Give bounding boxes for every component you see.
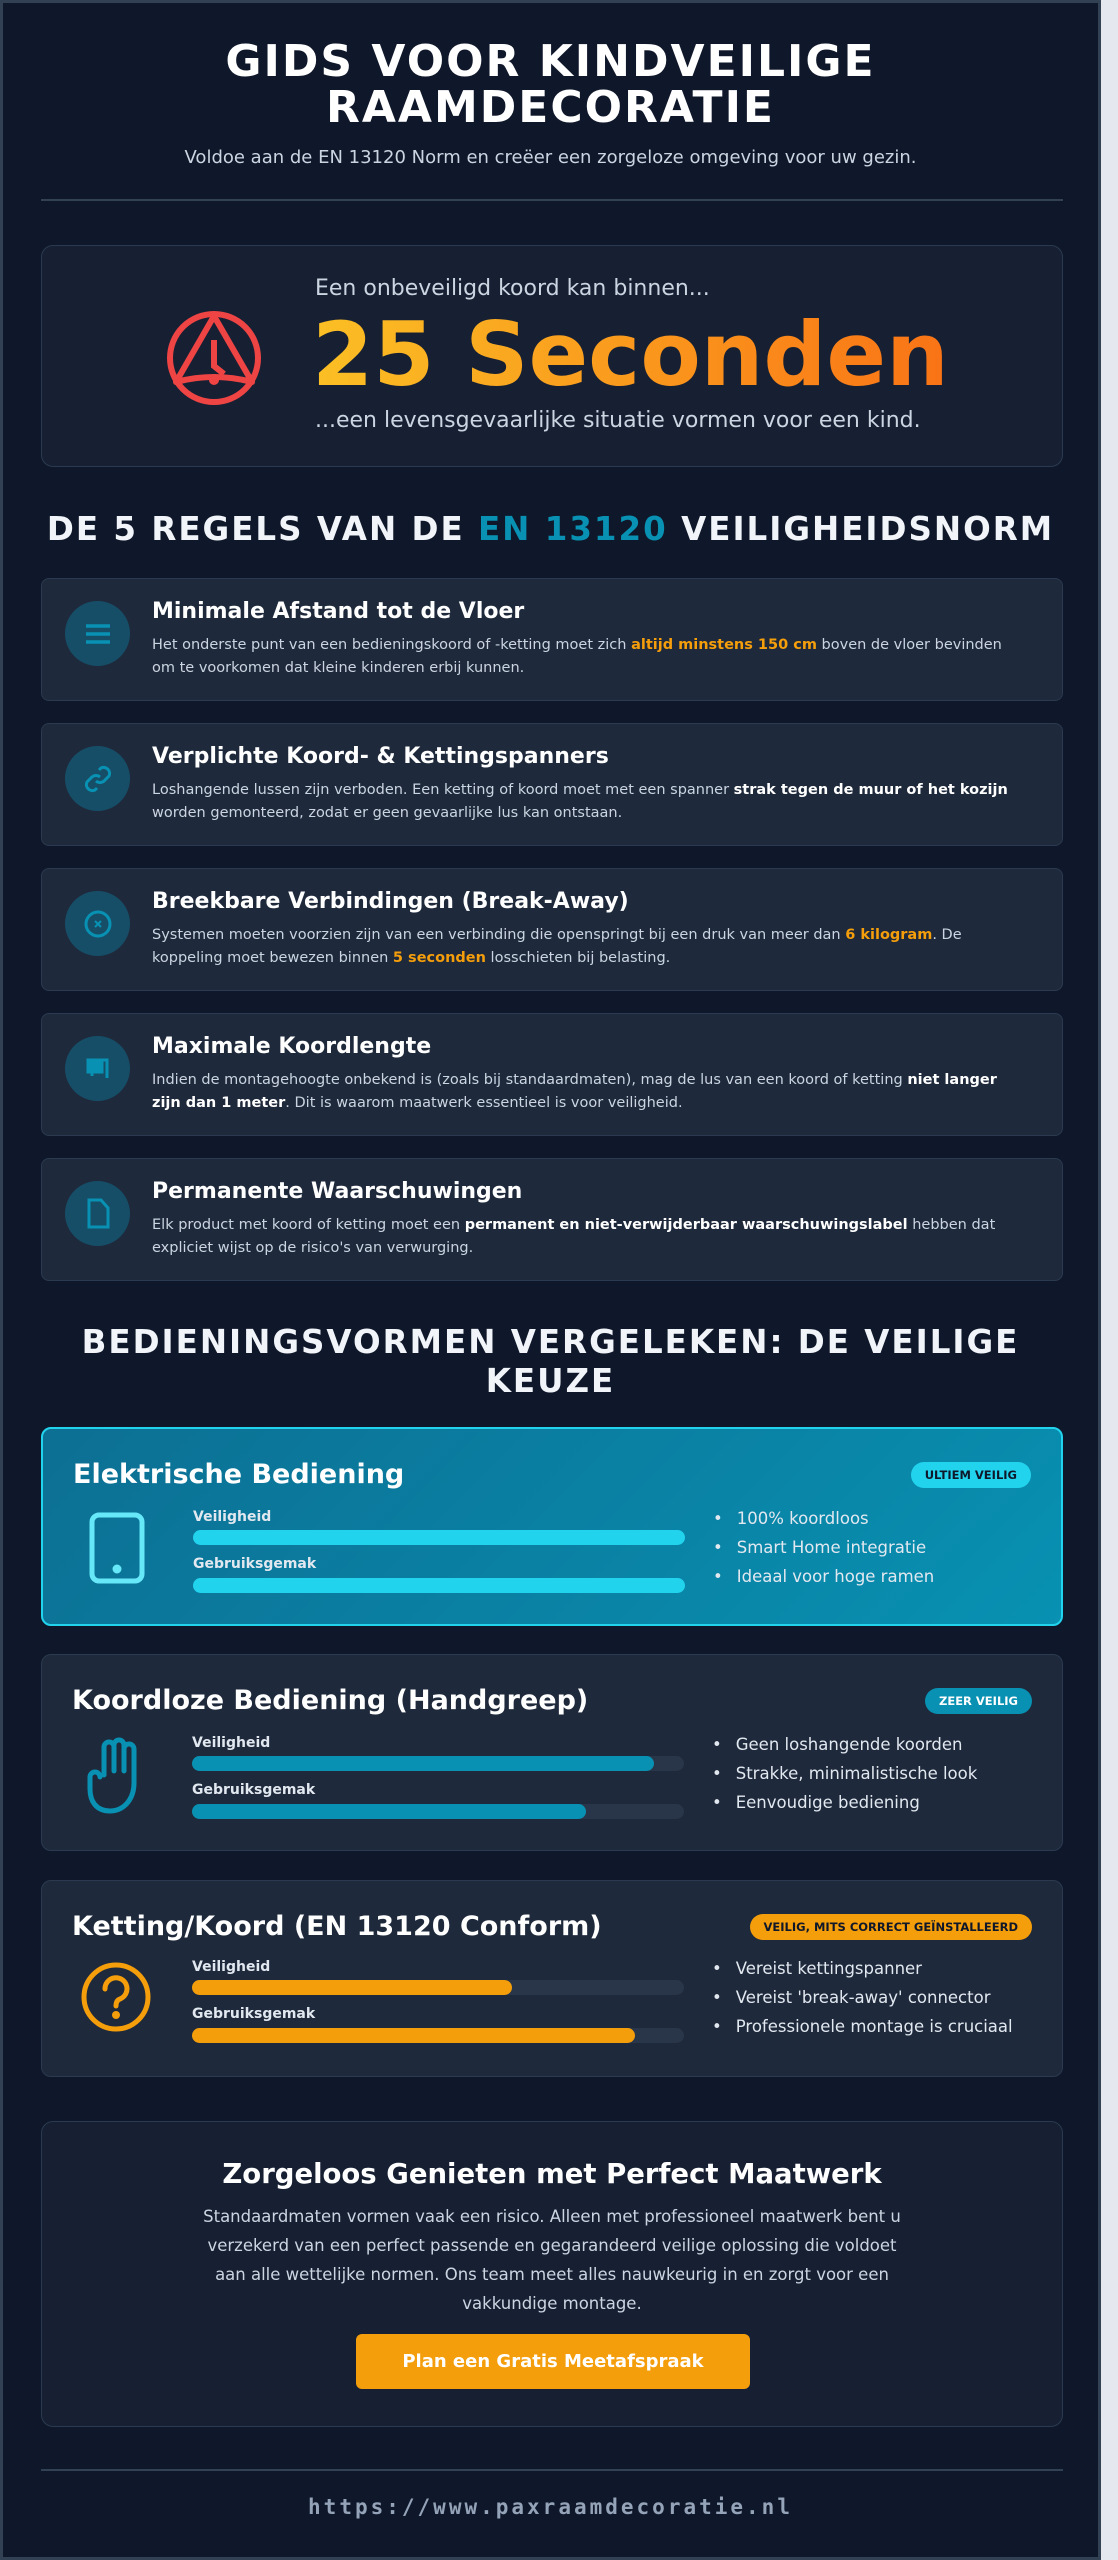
rule 1: Minimale Afstand tot de Vloer	[152, 599, 524, 624]
stat text: Een onbeveiligd koord kan binnen...	[315, 276, 710, 301]
panel: electric: Elektrische Bediening	[73, 1459, 404, 1490]
footer url: https://www.paxraamdecoratie.nl	[308, 2495, 793, 2519]
panel: chain/cord: VEILIG, MITS CORRECT GEÏNSTALLEERD	[764, 1920, 1018, 1934]
panel: cordless: Veiligheid	[192, 1735, 270, 1751]
rule 3: Systemen moeten voorzien zijn van een verbinding die openspringt bij een druk van meer dan 6 kilogram. De koppeling moet bewezen binnen 5 seconden losschieten bij belasting.	[152, 927, 962, 966]
panel: electric: Ideaal voor hoge ramen	[737, 1567, 934, 1586]
rule 3	[41, 868, 1063, 991]
heading: 5 rules: DE 5 REGELS VAN DE EN 13120 VEILIGHEIDSNORM	[47, 510, 1054, 548]
rule 4: Maximale Koordlengte	[152, 1034, 431, 1059]
panel: electric: Smart Home integratie	[737, 1538, 926, 1557]
panel: 25 seconds stat: 25 Seconden	[312, 303, 949, 406]
rule 4	[41, 1013, 1063, 1136]
CTA text: Standaardmaten vormen vaak een risico. Alleen met professioneel maatwerk bent u verzekerd van een perfect passende en gegarandeerd veilige oplossing die voldoet aan alle wettelijke normen. Ons team meet alles nauwkeurig in en zorgt voor een vakkundige montage.	[203, 2207, 901, 2313]
panel: 25 seconds stat: ...een levensgevaarlijke situatie vormen voor een kind.	[315, 408, 921, 433]
icon: tablet	[90, 1512, 144, 1584]
panel: cordless: Strakke, minimalistische look	[736, 1764, 977, 1783]
panel: chain/cord	[41, 1880, 1063, 2077]
panel: cordless: Geen loshangende koorden	[736, 1735, 963, 1754]
rule 2: Verplichte Koord- & Kettingspanners	[152, 744, 609, 769]
panel: cordless: Gebruiksgemak	[192, 1782, 315, 1798]
title: RAAMDECORATIE	[326, 82, 775, 133]
title	[225, 36, 876, 133]
panel: chain/cord: Vereist kettingspanner	[736, 1959, 922, 1978]
icon: question	[82, 1962, 150, 2032]
rule 5: Permanente Waarschuwingen	[152, 1179, 522, 1204]
rule 3: Breekbare Verbindingen (Break-Away)	[152, 889, 629, 914]
heading: comparison: KEUZE	[486, 1362, 615, 1400]
button: Plan een Gratis Meetafspraak	[402, 2351, 704, 2372]
panel: electric: Veiligheid	[193, 1509, 271, 1525]
rule 5: Elk product met koord of ketting moet een permanent en niet-verwijderbaar waarschuwingslabel hebben dat expliciet wijst op de risico's van verwurging.	[152, 1217, 995, 1256]
panel: chain/cord: Vereist 'break-away' connector	[736, 1988, 990, 2007]
rule 1	[41, 578, 1063, 701]
panel: electric: 100% koordloos	[737, 1509, 869, 1528]
rule 4: Indien de montagehoogte onbekend is (zoals bij standaardmaten), mag de lus van een koord of ketting niet langer zijn dan 1 meter. Dit is waarom maatwerk essentieel is voor veiligheid.	[152, 1072, 997, 1111]
CTA heading: Zorgeloos Genieten met Perfect Maatwerk	[222, 2158, 882, 2190]
panel: cordless: ZEER VEILIG	[939, 1694, 1018, 1708]
rule 1: Het onderste punt van een bedieningskoord of -ketting moet zich altijd minstens 150 cm boven de vloer bevinden om te voorkomen dat kleine kinderen erbij kunnen.	[152, 637, 1002, 676]
panel: chain/cord: Professionele montage is cruciaal	[736, 2017, 1013, 2036]
panel: cordless	[41, 1654, 1063, 1851]
panel: chain/cord: Ketting/Koord (EN 13120 Conform)	[72, 1911, 602, 1942]
button	[356, 2334, 750, 2389]
panel: cordless: Koordloze Bediening (Handgreep)	[72, 1685, 588, 1716]
title: GIDS VOOR KINDVEILIGE	[225, 36, 876, 87]
panel: cordless: Eenvoudige bediening	[736, 1793, 920, 1812]
rule 2: Loshangende lussen zijn verboden. Een ketting of koord moet met een spanner strak tegen de muur of het kozijn worden gemonteerd, zodat er geen gevaarlijke lus kan ontstaan.	[152, 782, 1008, 821]
panel: electric	[41, 1427, 1063, 1626]
icon: hand	[88, 1738, 136, 1814]
heading: comparison	[82, 1323, 1019, 1400]
panel: electric: Gebruiksgemak	[193, 1556, 316, 1572]
panel: CTA	[41, 2121, 1063, 2427]
panel: electric: ULTIEM VEILIG	[925, 1468, 1017, 1482]
subtitle: Voldoe aan de EN 13120 Norm en creëer een zorgeloze omgeving voor uw gezin.	[185, 147, 916, 168]
rule 5	[41, 1158, 1063, 1281]
panel: 25 seconds stat	[41, 245, 1063, 467]
panel: chain/cord: Veiligheid	[192, 1959, 270, 1975]
icon: warning clock	[167, 311, 261, 405]
rule 2	[41, 723, 1063, 846]
heading: comparison: BEDIENINGSVORMEN VERGELEKEN: DE VEILIGE	[82, 1323, 1019, 1361]
panel: chain/cord: Gebruiksgemak	[192, 2006, 315, 2022]
